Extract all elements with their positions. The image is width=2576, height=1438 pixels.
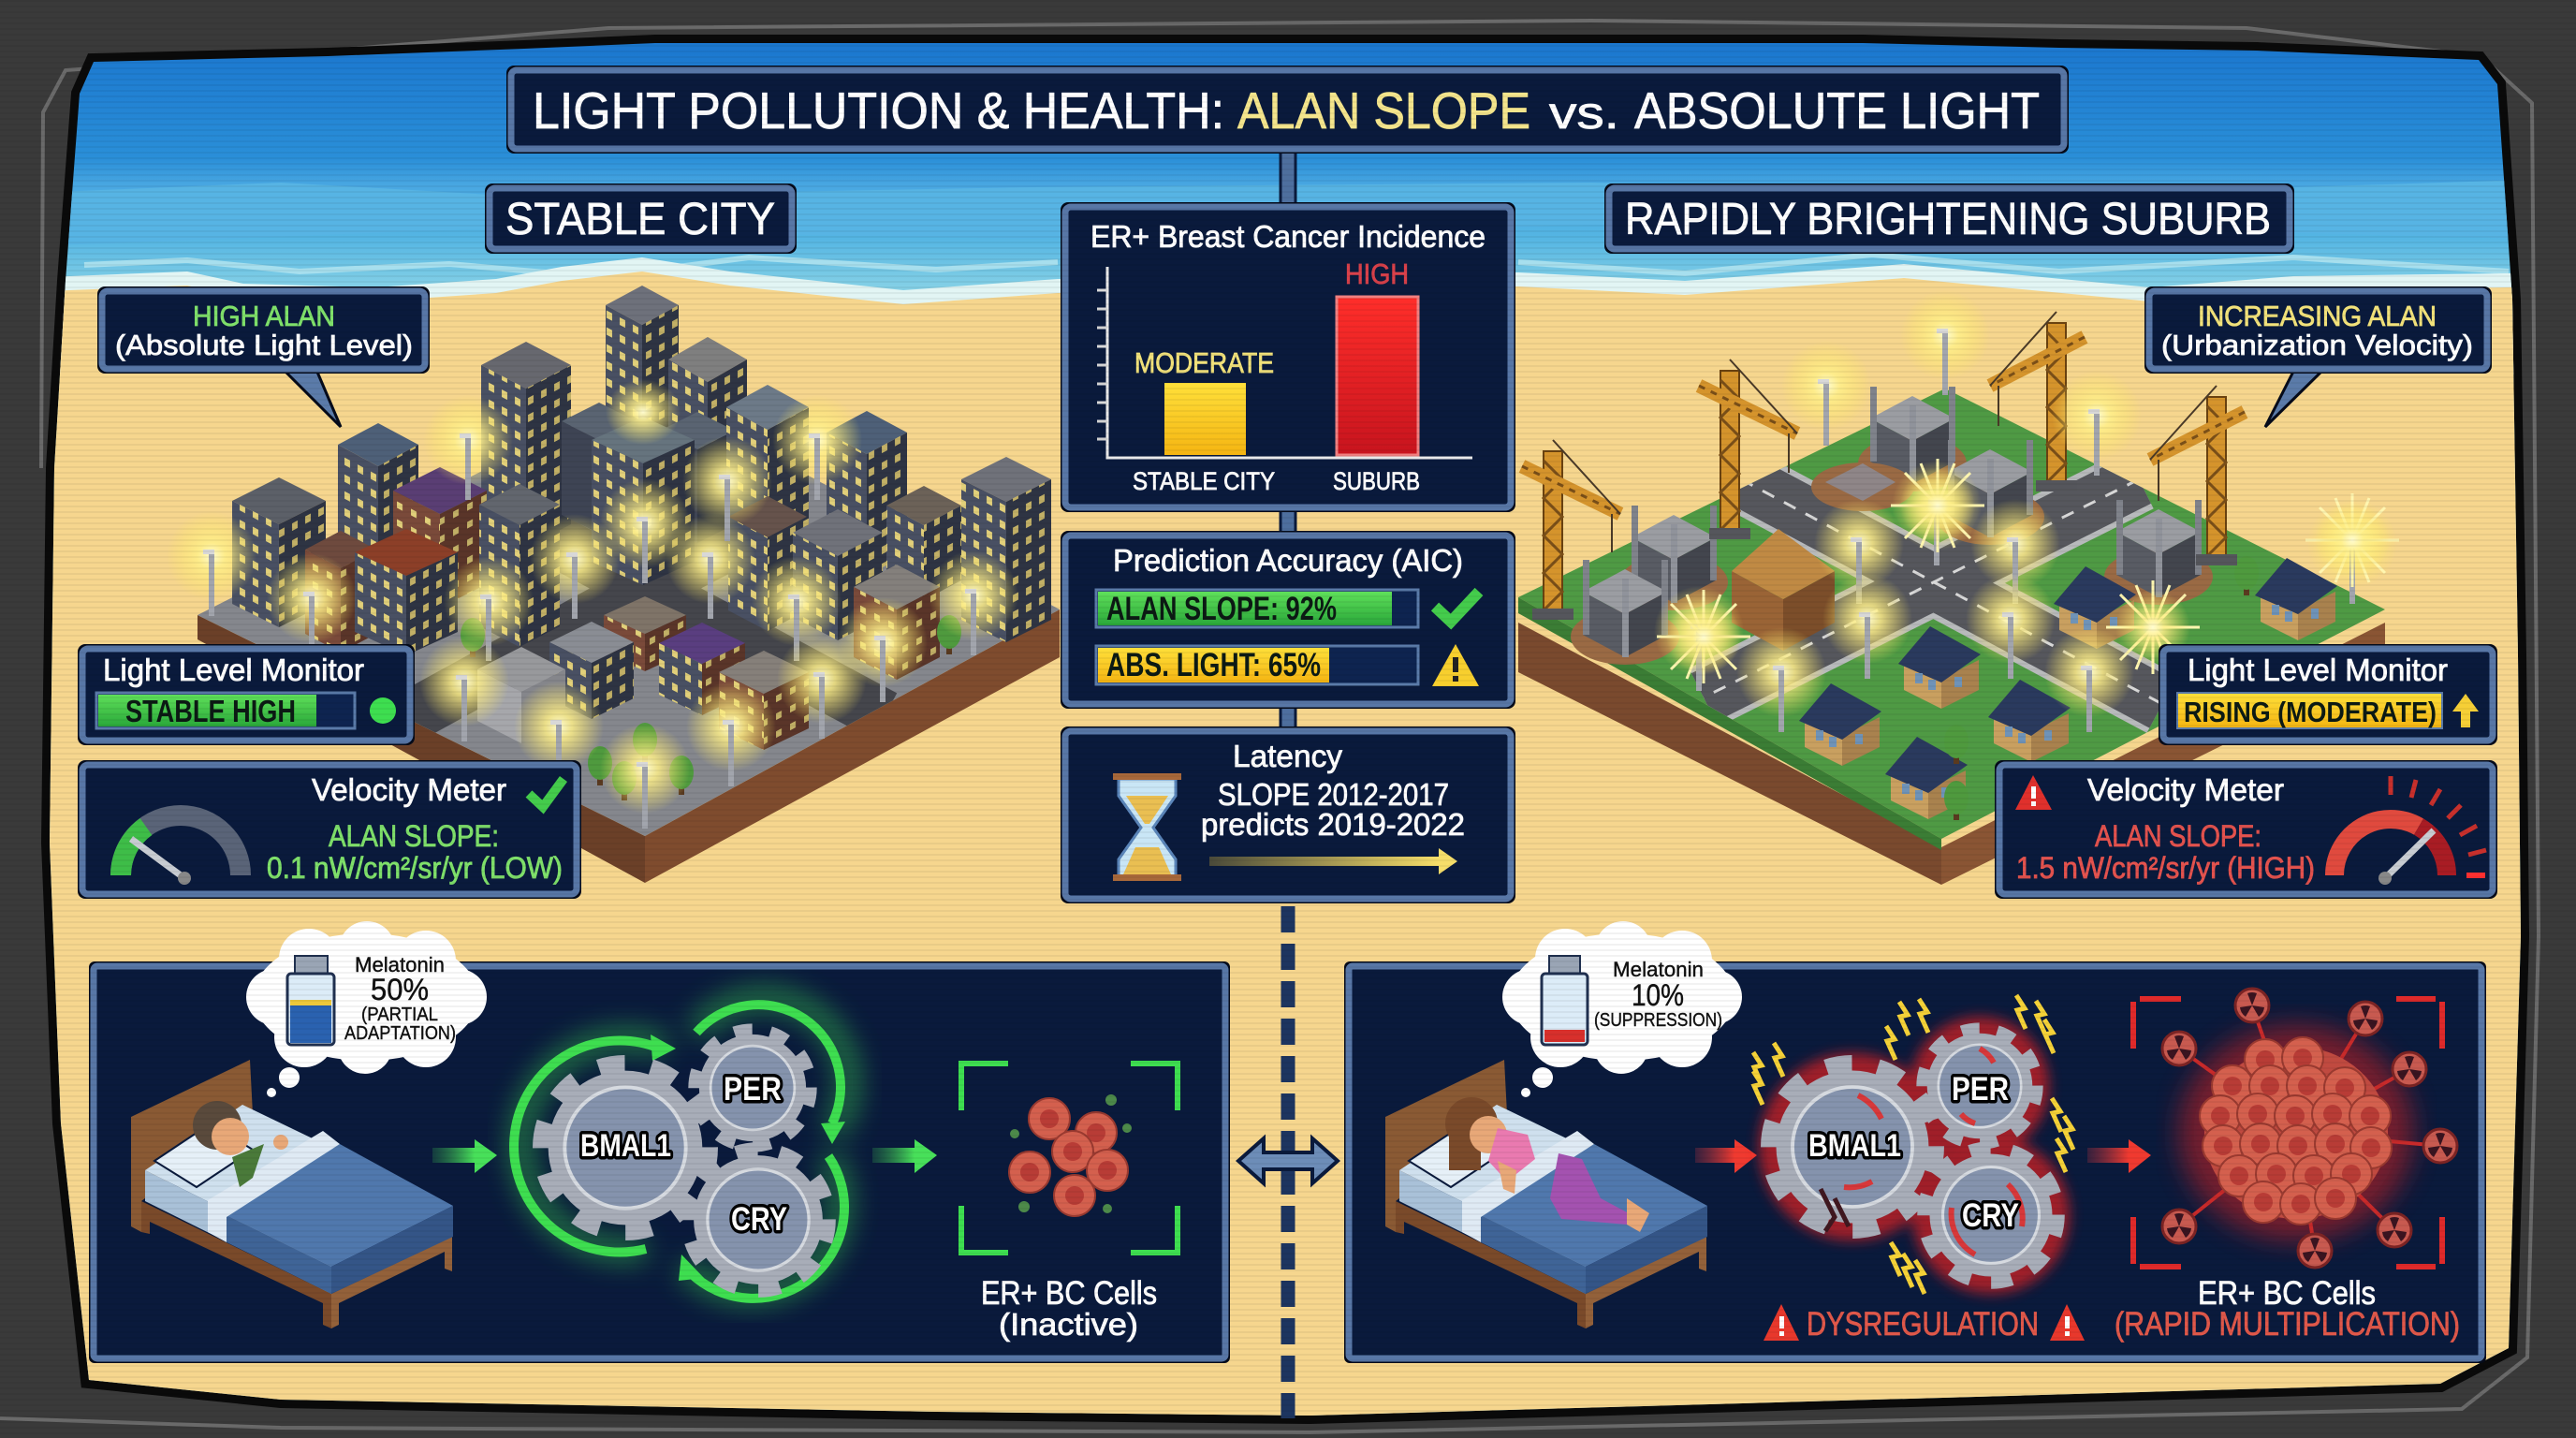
panel: light level monitor, suburb: Light Level Monitor: [2188, 653, 2448, 687]
arrow: bed to gears: [1695, 1139, 1757, 1173]
bar chart: STABLE CITY: [1133, 467, 1275, 495]
icon: circadian clock gears dysregulated: BMAL1: [1808, 1128, 1901, 1164]
arrow: double-headed comparison: [1238, 1138, 1338, 1183]
icon: check mark: [1435, 592, 1479, 622]
title bar: ABSOLUTE LIGHT: [1634, 81, 2040, 139]
arrow: gears to cells: [2087, 1139, 2151, 1173]
callout: increasing ALAN: [2144, 286, 2492, 427]
panel: latency: predicts 2019-2022: [1201, 807, 1465, 842]
bar chart: MODERATE: [1134, 346, 1274, 379]
icon: circadian clock gears dysregulated: [1753, 995, 2073, 1294]
icon: melatonin bottle half full: [287, 956, 334, 1045]
icon: thought bubble melatonin 50%: (PARTIAL: [361, 1005, 438, 1025]
bar: ALAN slope 92%: ALAN SLOPE: 92%: [1106, 591, 1337, 627]
heading: stable city: [485, 183, 797, 254]
panel: velocity meter, suburb: Velocity Meter: [2087, 772, 2284, 807]
title bar: LIGHT POLLUTION & HEALTH:: [533, 81, 1224, 139]
callout: increasing ALAN: INCREASING ALAN: [2198, 300, 2437, 332]
illustration: rapidly brightening suburb isometric block: [1518, 290, 2399, 885]
title bar: vs.: [1549, 89, 1619, 139]
bar: absolute light 65%: ABS. LIGHT: 65%: [1106, 647, 1321, 683]
panel: suburb biological pathway: (RAPID MULTIPLICATION): [2115, 1306, 2460, 1343]
icon: thought bubble melatonin 10%: (SUPPRESSION): [1594, 1010, 1722, 1031]
icon: thought bubble melatonin 50%: 50%: [371, 973, 429, 1006]
panel: stable city biological pathway: (Inactive): [999, 1307, 1138, 1342]
icon: multiplying tumor cells with radiation symbols: [2133, 989, 2457, 1268]
panel: prediction accuracy: Prediction Accuracy (AIC): [1113, 543, 1463, 578]
icon: circadian clock gears healthy: BMAL1: [580, 1128, 671, 1164]
icon: melatonin bottle nearly empty: [1542, 956, 1588, 1045]
icon: hourglass: [1113, 773, 1181, 881]
icon: circadian clock gears healthy: PER: [724, 1071, 782, 1108]
panel: velocity meter, suburb: [1995, 760, 2497, 899]
panel: velocity meter, suburb: 1.5 nW/cm²/sr/yr (HIGH): [2016, 851, 2315, 885]
panel: velocity meter, stable city: 0.1 nW/cm²/sr/yr (LOW): [267, 851, 563, 885]
bar chart: HIGH: [1345, 257, 1409, 290]
title bar: ALAN SLOPE: [1237, 81, 1530, 139]
gauge: high velocity: [2334, 776, 2486, 885]
icon: thought bubble melatonin 50%: ADAPTATION): [344, 1023, 456, 1044]
panel: light level monitor, suburb: RISING (MODERATE): [2184, 696, 2437, 728]
panel: ER+ breast cancer incidence chart: [1061, 202, 1515, 512]
arrow: bed to gears: [432, 1139, 497, 1173]
icon: thought bubble melatonin 50%: Melatonin: [355, 953, 445, 976]
panel: latency: [1061, 726, 1515, 903]
panel: light level monitor, stable city: STABLE HIGH: [125, 694, 296, 728]
callout: high ALAN: (Absolute Light Level): [115, 329, 413, 361]
icon: bed with restless person: [1385, 1060, 1707, 1328]
panel: velocity meter, stable city: Velocity Meter: [312, 772, 506, 807]
panel: velocity meter, suburb: ALAN SLOPE:: [2095, 819, 2261, 853]
panel: prediction accuracy: [1061, 531, 1515, 709]
callout: high ALAN: [97, 286, 430, 427]
icon: thought bubble melatonin 10%: 10%: [1632, 978, 1684, 1012]
title bar: [506, 66, 2069, 154]
icon: tower cranes: [1522, 312, 2245, 620]
panel: light level monitor, stable city: [78, 644, 415, 745]
panel: velocity meter, stable city: [78, 760, 581, 899]
heading: rapidly brightening suburb: RAPIDLY BRIGHTENING SUBURB: [1625, 195, 2271, 244]
arrow: gears to cells: [872, 1139, 937, 1173]
panel: stable city biological pathway: [89, 921, 1230, 1363]
heading: stable city: STABLE CITY: [505, 195, 775, 244]
callout: increasing ALAN: (Urbanization Velocity): [2161, 329, 2473, 361]
panel: latency: SLOPE 2012-2017: [1218, 777, 1449, 812]
icon: up arrow: [2452, 694, 2479, 727]
panel: ER+ breast cancer incidence chart: ER+ Breast Cancer Incidence: [1090, 219, 1486, 254]
panel: suburb biological pathway: [1344, 921, 2486, 1363]
icon: warning triangle: [1432, 644, 1479, 686]
callout: high ALAN: HIGH ALAN: [193, 300, 335, 332]
panel: velocity meter, stable city: ALAN SLOPE:: [329, 819, 499, 853]
arrow: latency timeline: [1209, 848, 1457, 874]
building: brown apartment: [1732, 529, 1835, 651]
heading: rapidly brightening suburb: [1604, 183, 2294, 254]
icon: circadian clock gears healthy: [514, 998, 849, 1299]
icon: red warning triangle: [2015, 775, 2052, 810]
icon: circadian clock gears dysregulated: CRY: [1962, 1197, 2019, 1234]
warning label: dysregulation: DYSREGULATION: [1807, 1306, 2039, 1343]
panel: light level monitor, stable city: Light Level Monitor: [103, 653, 364, 687]
icon: check mark: [529, 779, 564, 807]
panel: light level monitor, suburb: [2159, 644, 2497, 745]
panel: stable city biological pathway: ER+ BC Cells: [981, 1275, 1157, 1312]
icon: thought bubble melatonin 10%: Melatonin: [1613, 958, 1704, 981]
center divider line: [1281, 150, 1295, 1418]
bar chart: [1097, 257, 1472, 495]
icon: circadian clock gears dysregulated: PER: [1952, 1071, 2009, 1108]
bar chart: SUBURB: [1333, 467, 1420, 495]
icon: circadian clock gears healthy: CRY: [731, 1201, 787, 1238]
panel: suburb biological pathway: ER+ BC Cells: [2198, 1275, 2376, 1312]
illustration: stable city isometric block: [167, 286, 1060, 883]
icon: inactive ER+ BC cells in green brackets: [961, 1064, 1178, 1253]
icon: bed with sleeping person: [131, 1060, 453, 1328]
icon: thought bubble melatonin 50%: [246, 921, 487, 1097]
panel: latency: Latency: [1233, 739, 1342, 773]
icon: green status light: [370, 697, 396, 724]
gauge: low velocity: [121, 815, 241, 885]
icon: thought bubble melatonin 10%: [1502, 921, 1742, 1097]
